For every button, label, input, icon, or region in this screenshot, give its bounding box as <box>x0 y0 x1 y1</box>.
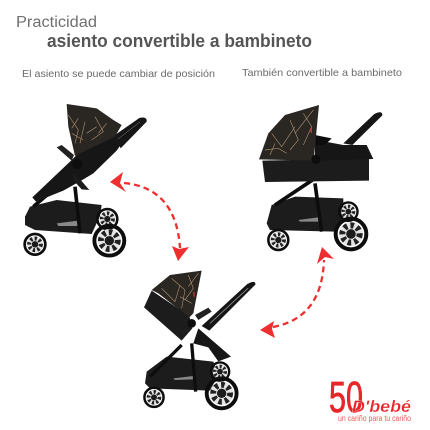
title: asiento convertible a bambineto: asiento convertible a bambineto <box>47 31 312 51</box>
stroller: reclined seat, left <box>25 104 147 256</box>
logo: 50 D'bebé: un cariño para tu cariño <box>338 414 411 423</box>
caption: left: El asiento se puede cambiar de posición <box>22 68 215 80</box>
caption: right: También convertible a bambineto <box>242 67 402 79</box>
arrow: right curved double-headed <box>260 247 334 338</box>
logo: 50 D'bebé: 50 <box>329 373 363 422</box>
title: Practicidad: Practicidad <box>16 14 97 31</box>
logo: 50 D'bebé <box>329 373 411 423</box>
stroller: bassinet mode, right <box>259 105 382 250</box>
stroller: forward seat, bottom centre <box>144 271 255 408</box>
logo: 50 D'bebé: D'bebé <box>352 397 411 416</box>
arrow: left curved double-headed <box>110 172 189 261</box>
